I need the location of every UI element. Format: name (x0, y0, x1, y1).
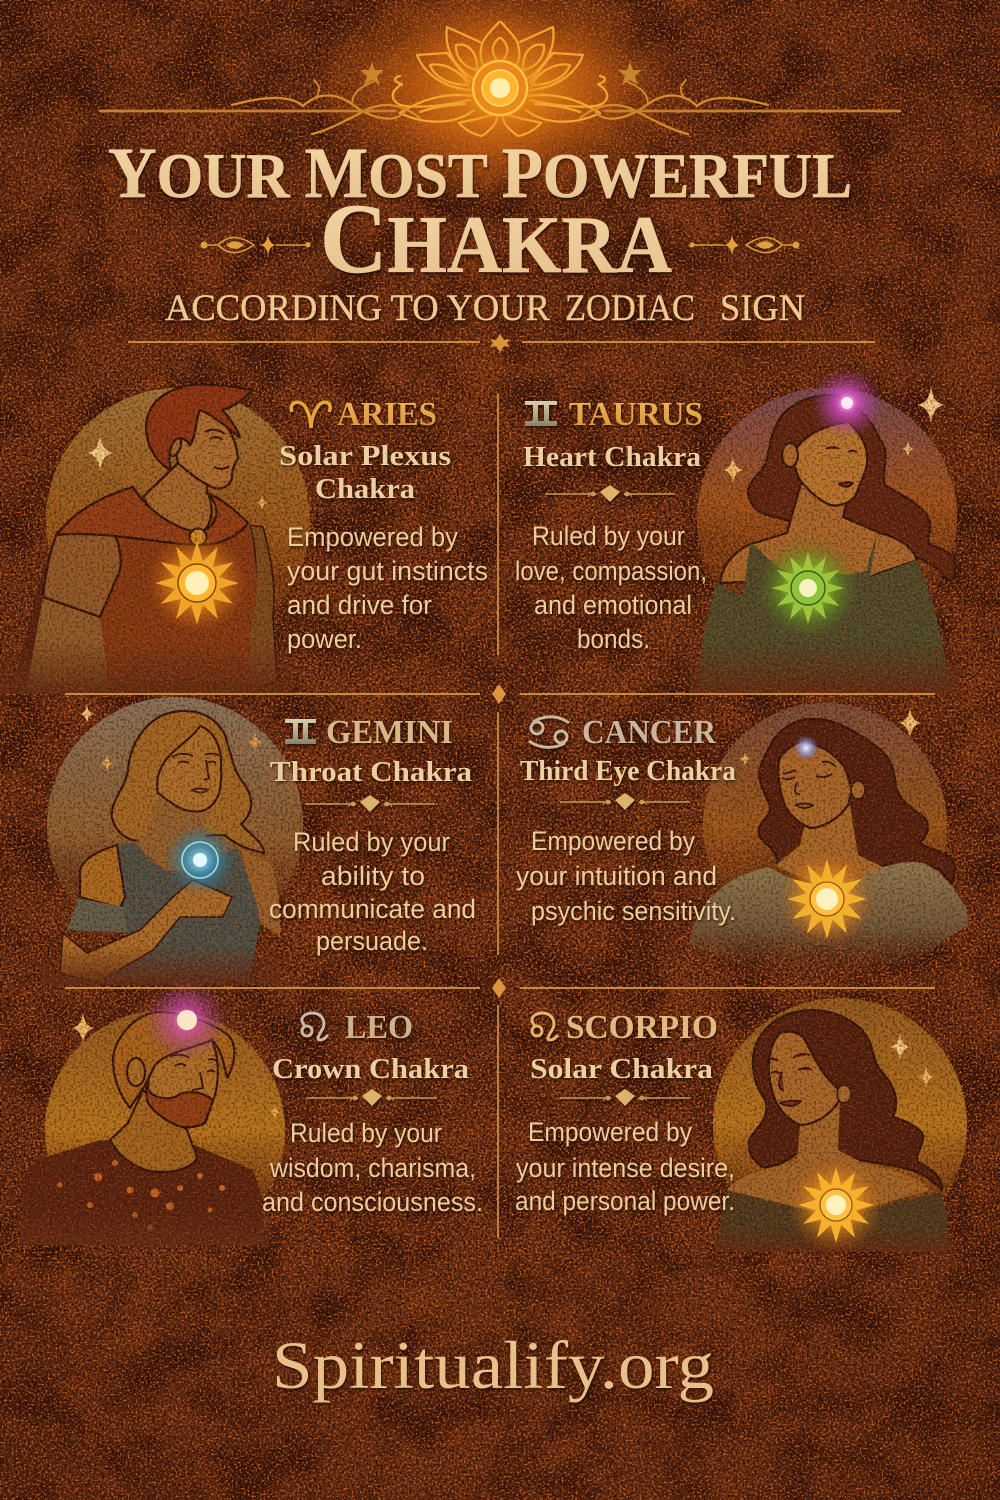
panel: Taurus text: bonds. (577, 624, 650, 654)
portrait: Leo man (20, 1010, 285, 1250)
chakra: Aries solar plexus (147, 533, 247, 633)
header lotus ornament (100, 22, 900, 136)
icon: Scorpio symbol (532, 1013, 558, 1040)
subtitle: SIGN (720, 288, 805, 329)
subtitle: ACCORDING TO YOUR (165, 288, 550, 329)
icon: Gemini symbol (285, 719, 316, 744)
panel: Aries text: and drive for (287, 590, 432, 620)
title: YOUR MOST POWERFUL (108, 133, 852, 213)
panel: Aries text (279, 396, 488, 654)
portraits layer (0, 384, 968, 1252)
panel: Gemini text: Ruled by your (293, 827, 450, 857)
header glow (310, 0, 690, 210)
panel: Cancer text (516, 714, 736, 926)
panel: Gemini text: GEMINI (326, 714, 453, 751)
panel: Scorpio text: and personal power. (515, 1186, 735, 1216)
panel: Gemini text: Throat Chakra (270, 756, 473, 788)
portrait: Scorpio woman (713, 998, 967, 1252)
panel: Scorpio text: Solar Chakra (530, 1053, 714, 1085)
light grain over portraits (0, 380, 1000, 1260)
title side ornaments (200, 234, 800, 256)
panel: Cancer text: psychic sensitivity. (531, 896, 736, 926)
panel: Leo text: Ruled by your (290, 1118, 442, 1148)
title: CHAKRA (320, 183, 672, 294)
panel: Leo text: Crown Chakra (272, 1053, 470, 1085)
panel: Scorpio text: your intense desire, (516, 1153, 735, 1183)
panel: Aries text: Solar Plexus (279, 440, 451, 472)
icon: Leo symbol (302, 1013, 328, 1040)
panel: Leo text: wisdom, charisma, (269, 1153, 476, 1183)
panel: Gemini text: ability to (321, 861, 425, 891)
icon: Aries symbol (291, 402, 330, 428)
panel: Taurus text: love, compassion, (515, 556, 707, 586)
panel: Aries text: your gut instincts (287, 556, 488, 586)
dividers (65, 334, 935, 1238)
chakra: Gemini throat (164, 824, 236, 896)
panel: Taurus text (515, 396, 707, 654)
panel: Cancer text: your intuition and (516, 861, 717, 891)
panel: Aries text: Empowered by (287, 522, 458, 552)
footer brand: Spiritualify.org (272, 1327, 714, 1403)
panel: Aries text: Chakra (315, 473, 416, 505)
panel: Cancer text: CANCER (582, 714, 716, 751)
panel: Aries text: power. (287, 624, 362, 654)
panel: Leo text (262, 1009, 483, 1217)
chakra: Cancer solar and third eye (779, 735, 875, 947)
title (108, 133, 852, 294)
panel: Gemini text (269, 714, 476, 956)
panel: Scorpio text: Empowered by (528, 1117, 692, 1147)
chakra: Leo crown (144, 978, 228, 1062)
panel: Taurus text: Ruled by your (532, 521, 685, 551)
panel: Cancer text: Third Eye Chakra (520, 755, 736, 787)
panel: Taurus text: Heart Chakra (523, 441, 702, 473)
panel: Gemini text: communicate and (269, 894, 476, 924)
subtitle (165, 288, 805, 329)
panel: Scorpio text: SCORPIO (566, 1009, 718, 1046)
panel: Aries text: ARIES (337, 396, 437, 433)
panel: Gemini text: persuade. (316, 926, 428, 956)
panel: Scorpio text (515, 1009, 735, 1216)
panel: Leo text: LEO (345, 1009, 413, 1046)
panel: Taurus text: TAURUS (569, 396, 703, 433)
panel: Cancer text: Empowered by (531, 826, 695, 856)
subtitle: ZODIAC (565, 288, 695, 329)
icon: Taurus symbol (525, 401, 557, 426)
chakra: Scorpio solar (788, 1157, 884, 1253)
portrait: Taurus woman (690, 387, 960, 694)
panel: Taurus text: and emotional (534, 590, 692, 620)
portrait: Cancer woman (690, 703, 968, 972)
chakra: Taurus heart and crown glow (756, 367, 883, 640)
icon: Cancer symbol (529, 717, 569, 747)
portrait: Aries man (0, 384, 310, 694)
panel: Leo text: and consciousness. (262, 1187, 483, 1217)
portrait: Gemini woman (40, 697, 303, 985)
